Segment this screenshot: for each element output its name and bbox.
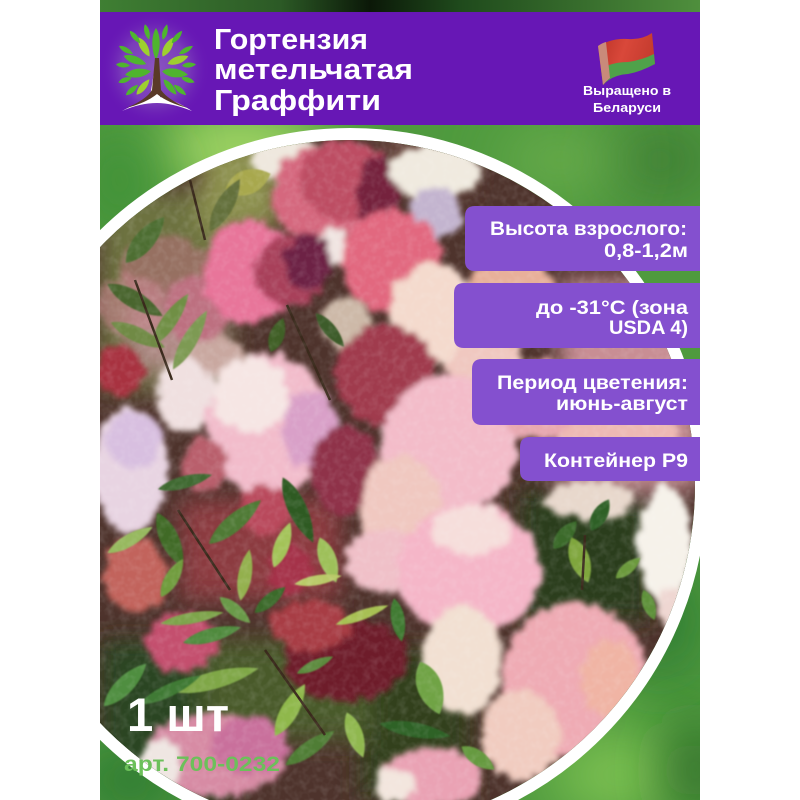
- label: frost hardiness: [454, 283, 700, 348]
- title: [214, 24, 413, 117]
- card background: blurred green foliage: [100, 125, 700, 800]
- label: flowering period: июнь-август: [556, 394, 688, 415]
- flower heads: [92, 138, 693, 800]
- grain overlay for petal texture: [100, 130, 700, 800]
- logo: tree: [116, 24, 196, 111]
- label: height: [465, 206, 700, 271]
- quantity: 1 шт: [127, 688, 229, 741]
- photo: hydrangea flowers in white circular frame: [0, 130, 701, 800]
- soft colour base: [100, 130, 700, 800]
- top foliage strip: [100, 0, 700, 12]
- caption: grown in Belarus: Беларуси: [593, 100, 661, 115]
- label: container: Контейнер Р9: [544, 451, 688, 472]
- title: метельчатая: [214, 54, 413, 86]
- title: Гортензия: [214, 24, 368, 56]
- header band: [100, 12, 700, 125]
- leaves: [98, 162, 660, 776]
- label: height: Высота взрослого:: [490, 219, 687, 240]
- label: flowering period: Период цветения:: [497, 373, 688, 394]
- label: height: 0,8-1,2м: [604, 241, 688, 262]
- label: flowering period: [472, 359, 700, 425]
- icon: Belarus flag: [598, 33, 655, 85]
- caption: grown in Belarus: Выращено в: [583, 83, 671, 98]
- stems: [135, 180, 585, 735]
- white ring: [100, 128, 700, 800]
- label: frost hardiness: USDA 4): [609, 318, 688, 339]
- caption: grown in Belarus: [583, 83, 671, 115]
- label: container: [520, 437, 700, 481]
- title: Граффити: [214, 85, 381, 117]
- label: frost hardiness: до -31°C (зона: [536, 298, 688, 319]
- article number: арт. 700-0232: [124, 753, 280, 776]
